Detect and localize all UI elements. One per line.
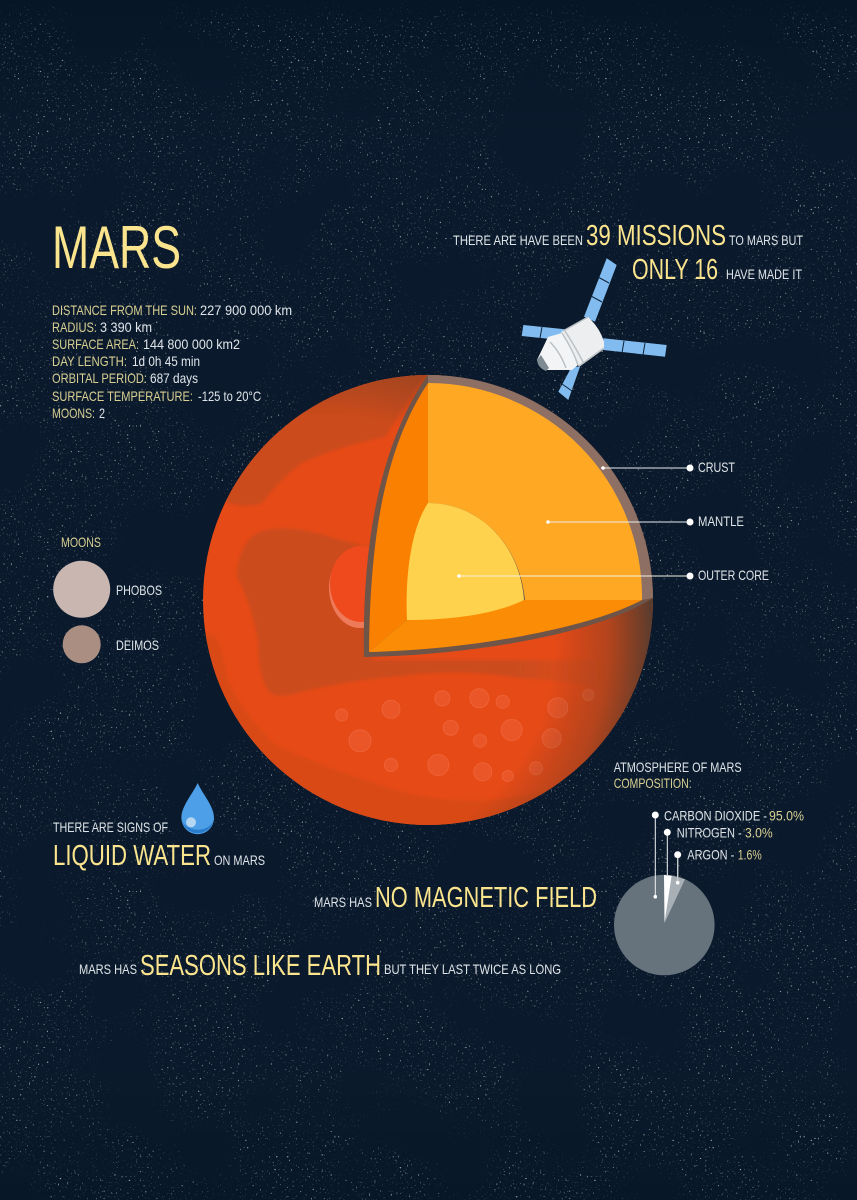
fact: radius: RADIUS: — [52, 319, 97, 335]
icon: satellite — [522, 258, 667, 400]
panel: atmosphere — [614, 759, 804, 975]
title: MARS — [52, 214, 181, 281]
text block: planet facts — [52, 302, 292, 421]
mantle floor — [369, 600, 642, 652]
callout: liquid water: THERE ARE SIGNS OF — [53, 819, 168, 835]
legend: argon — [674, 847, 762, 884]
callout: seasons: BUT THEY LAST TWICE AS LONG — [384, 961, 561, 977]
fact: orbital period: 687 days — [150, 370, 198, 386]
mantle side wall — [369, 383, 428, 652]
panel: moons — [53, 534, 162, 663]
crater — [329, 570, 364, 628]
label: outer core — [457, 567, 769, 583]
shadow — [315, 375, 653, 818]
callout: missions: HAVE MADE IT — [726, 266, 802, 282]
fact: distance: 227 900 000 km — [200, 302, 292, 318]
callout: magnetic field — [314, 882, 597, 914]
fact: day length: DAY LENGTH: — [52, 353, 127, 369]
fact: orbital period: ORBITAL PERIOD: — [52, 370, 147, 386]
fact: radius — [52, 319, 152, 335]
label: mantle: MANTLE — [698, 513, 744, 529]
icon: water drop — [181, 783, 214, 834]
legend: carbon dioxide — [652, 807, 804, 898]
label: mantle — [546, 513, 744, 529]
fact: temperature: -125 to 20°C — [198, 388, 261, 404]
callout: missions: 39 MISSIONS — [586, 220, 726, 252]
crust cut — [364, 375, 653, 657]
fact: distance: DISTANCE FROM THE SUN: — [52, 302, 197, 318]
planet: Mars cutaway — [196, 370, 660, 830]
capsule — [537, 333, 578, 370]
fact: day length — [52, 353, 200, 369]
planet body — [203, 375, 653, 825]
legend: argon: 1.6% — [738, 847, 762, 863]
pie chart — [614, 875, 715, 975]
label: outer core: OUTER CORE — [698, 567, 769, 583]
fact: moons: 2 — [99, 405, 105, 421]
service module — [561, 317, 604, 367]
fact: surface area: SURFACE AREA: — [52, 336, 139, 352]
fact: surface area: 144 800 000 km2 — [143, 336, 240, 352]
legend: carbon dioxide: 95.0% — [769, 807, 804, 823]
callout: liquid water — [53, 783, 265, 872]
heading: atmosphere: ATMOSPHERE OF MARS — [614, 759, 742, 775]
callout: seasons — [79, 950, 561, 982]
legend: carbon dioxide: CARBON DIOXIDE - — [664, 807, 767, 823]
nose — [537, 355, 549, 371]
fact: moons: MOONS: — [52, 405, 95, 421]
mantle face — [428, 383, 642, 600]
callout: seasons: MARS HAS — [79, 961, 137, 977]
callout: magnetic field: NO MAGNETIC FIELD — [375, 882, 597, 914]
label: crust: CRUST — [698, 459, 735, 475]
moon: Deimos: DEIMOS — [116, 637, 159, 653]
surface regions — [196, 370, 660, 830]
legend: nitrogen: NITROGEN - — [677, 824, 742, 840]
callout: seasons: SEASONS LIKE EARTH — [140, 950, 381, 982]
solar panels — [522, 258, 667, 400]
small craters — [336, 689, 594, 782]
callout: missions: THERE ARE HAVE BEEN — [453, 232, 583, 248]
heading: atmosphere: COMPOSITION: — [614, 775, 692, 791]
heading: moons: MOONS — [61, 534, 101, 550]
callout: missions: ONLY 16 — [632, 254, 718, 286]
label: crust — [601, 459, 735, 475]
moon: Phobos: PHOBOS — [116, 582, 162, 598]
fact: radius: 3 390 km — [100, 319, 152, 335]
fact: temperature: SURFACE TEMPERATURE: — [52, 388, 193, 404]
legend: nitrogen: 3.0% — [745, 824, 773, 840]
callout: missions: TO MARS BUT — [729, 232, 803, 248]
callout: liquid water: ON MARS — [214, 852, 265, 868]
legend: argon: ARGON - — [687, 847, 735, 863]
fact: surface area — [52, 336, 240, 352]
legend: nitrogen — [664, 824, 773, 875]
callout: magnetic field: MARS HAS — [314, 894, 372, 910]
callout: liquid water: LIQUID WATER — [53, 840, 211, 872]
callout: missions — [453, 220, 803, 286]
heading: atmosphere — [614, 759, 742, 791]
fact: day length: 1d 0h 45 min — [132, 353, 200, 369]
outer core — [407, 503, 524, 620]
